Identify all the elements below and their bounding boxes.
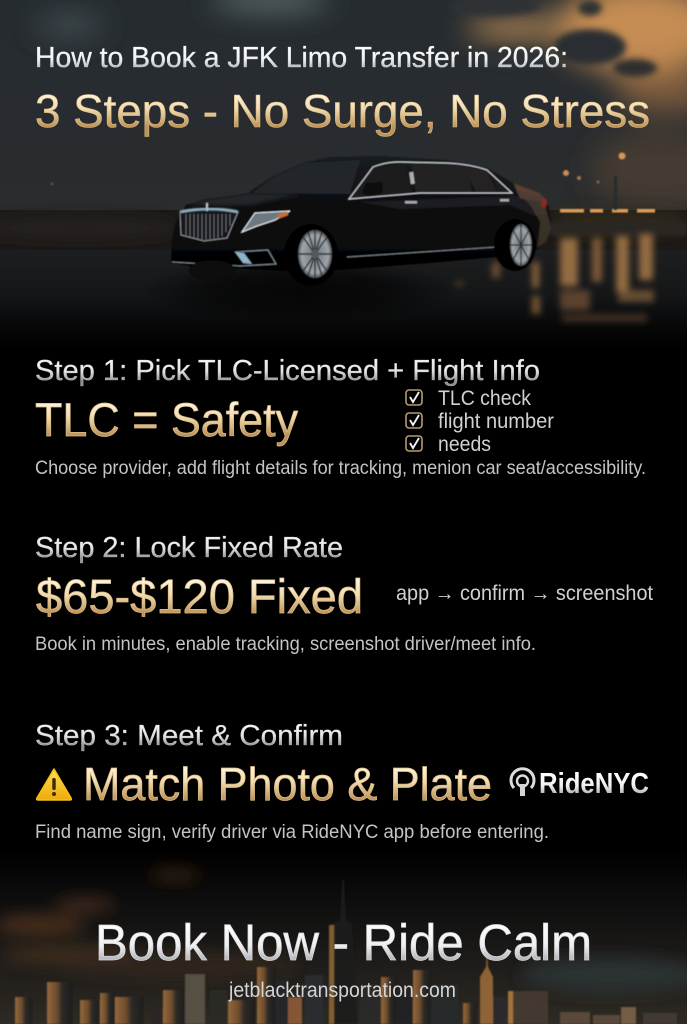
step 3 panel — [35, 720, 649, 843]
footer photo: dusk New York skyline — [0, 850, 687, 1024]
step 1 description: Choose provider, add flight details for tracking, menion car seat/accessibility. — [35, 458, 646, 479]
subtitle line: How to Book a JFK Limo Transfer in 2026: — [35, 42, 568, 74]
hood sheen — [186, 193, 300, 206]
car reflection on the wet ground — [140, 258, 460, 326]
step 1 heading: Step 1: Pick TLC-Licensed + Flight Info — [35, 355, 540, 387]
side windows — [350, 163, 412, 198]
step 3 heading: Step 3: Meet & Confirm — [35, 720, 343, 752]
step 1 checklist — [406, 387, 554, 456]
rear wheel — [494, 219, 536, 271]
front hidden wheel — [189, 260, 235, 280]
step 2 description: Book in minutes, enable tracking, screenshot driver/meet info. — [35, 634, 536, 655]
step 2 panel — [35, 532, 653, 655]
lower bumper — [172, 250, 276, 266]
call to action: Book Now - Ride Calm — [95, 914, 592, 971]
icon: warning triangle — [37, 769, 71, 800]
limousine illustration — [171, 156, 552, 286]
grille — [180, 203, 238, 241]
reflections on wet tarmac — [455, 234, 654, 322]
car body — [171, 156, 552, 272]
step 1 checklist: needs — [438, 433, 491, 456]
front wheel — [284, 224, 338, 286]
step 2 flow: app → confirm → screenshot — [396, 582, 653, 605]
step 1 headline: TLC = Safety — [35, 393, 298, 446]
hero photo background: stormy sky and wet airport tarmac — [0, 0, 687, 350]
step 1 checklist: TLC check — [438, 387, 531, 410]
RideNYC logo: RideNYC — [539, 768, 649, 800]
step 3 description: Find name sign, verify driver via RideNYC app before entering. — [35, 822, 549, 843]
step 1 panel — [35, 355, 646, 479]
headlight — [242, 211, 290, 232]
chrome window trim — [349, 162, 512, 199]
step 2 price headline: $65-$120 Fixed — [36, 571, 363, 624]
step 1 checklist: flight number — [438, 410, 554, 433]
step 2 heading: Step 2: Lock Fixed Rate — [35, 532, 343, 564]
main title line: 3 Steps - No Surge, No Stress — [35, 85, 650, 137]
step 3 headline: Match Photo & Plate — [83, 758, 492, 810]
title heading — [35, 42, 650, 137]
website url: jetblacktransportation.com — [228, 979, 456, 1002]
windshield — [252, 160, 360, 194]
side panel sheen — [360, 196, 548, 216]
airport lamps — [51, 152, 626, 210]
skyline buildings — [15, 880, 677, 1024]
door handles and mirror — [347, 182, 509, 257]
